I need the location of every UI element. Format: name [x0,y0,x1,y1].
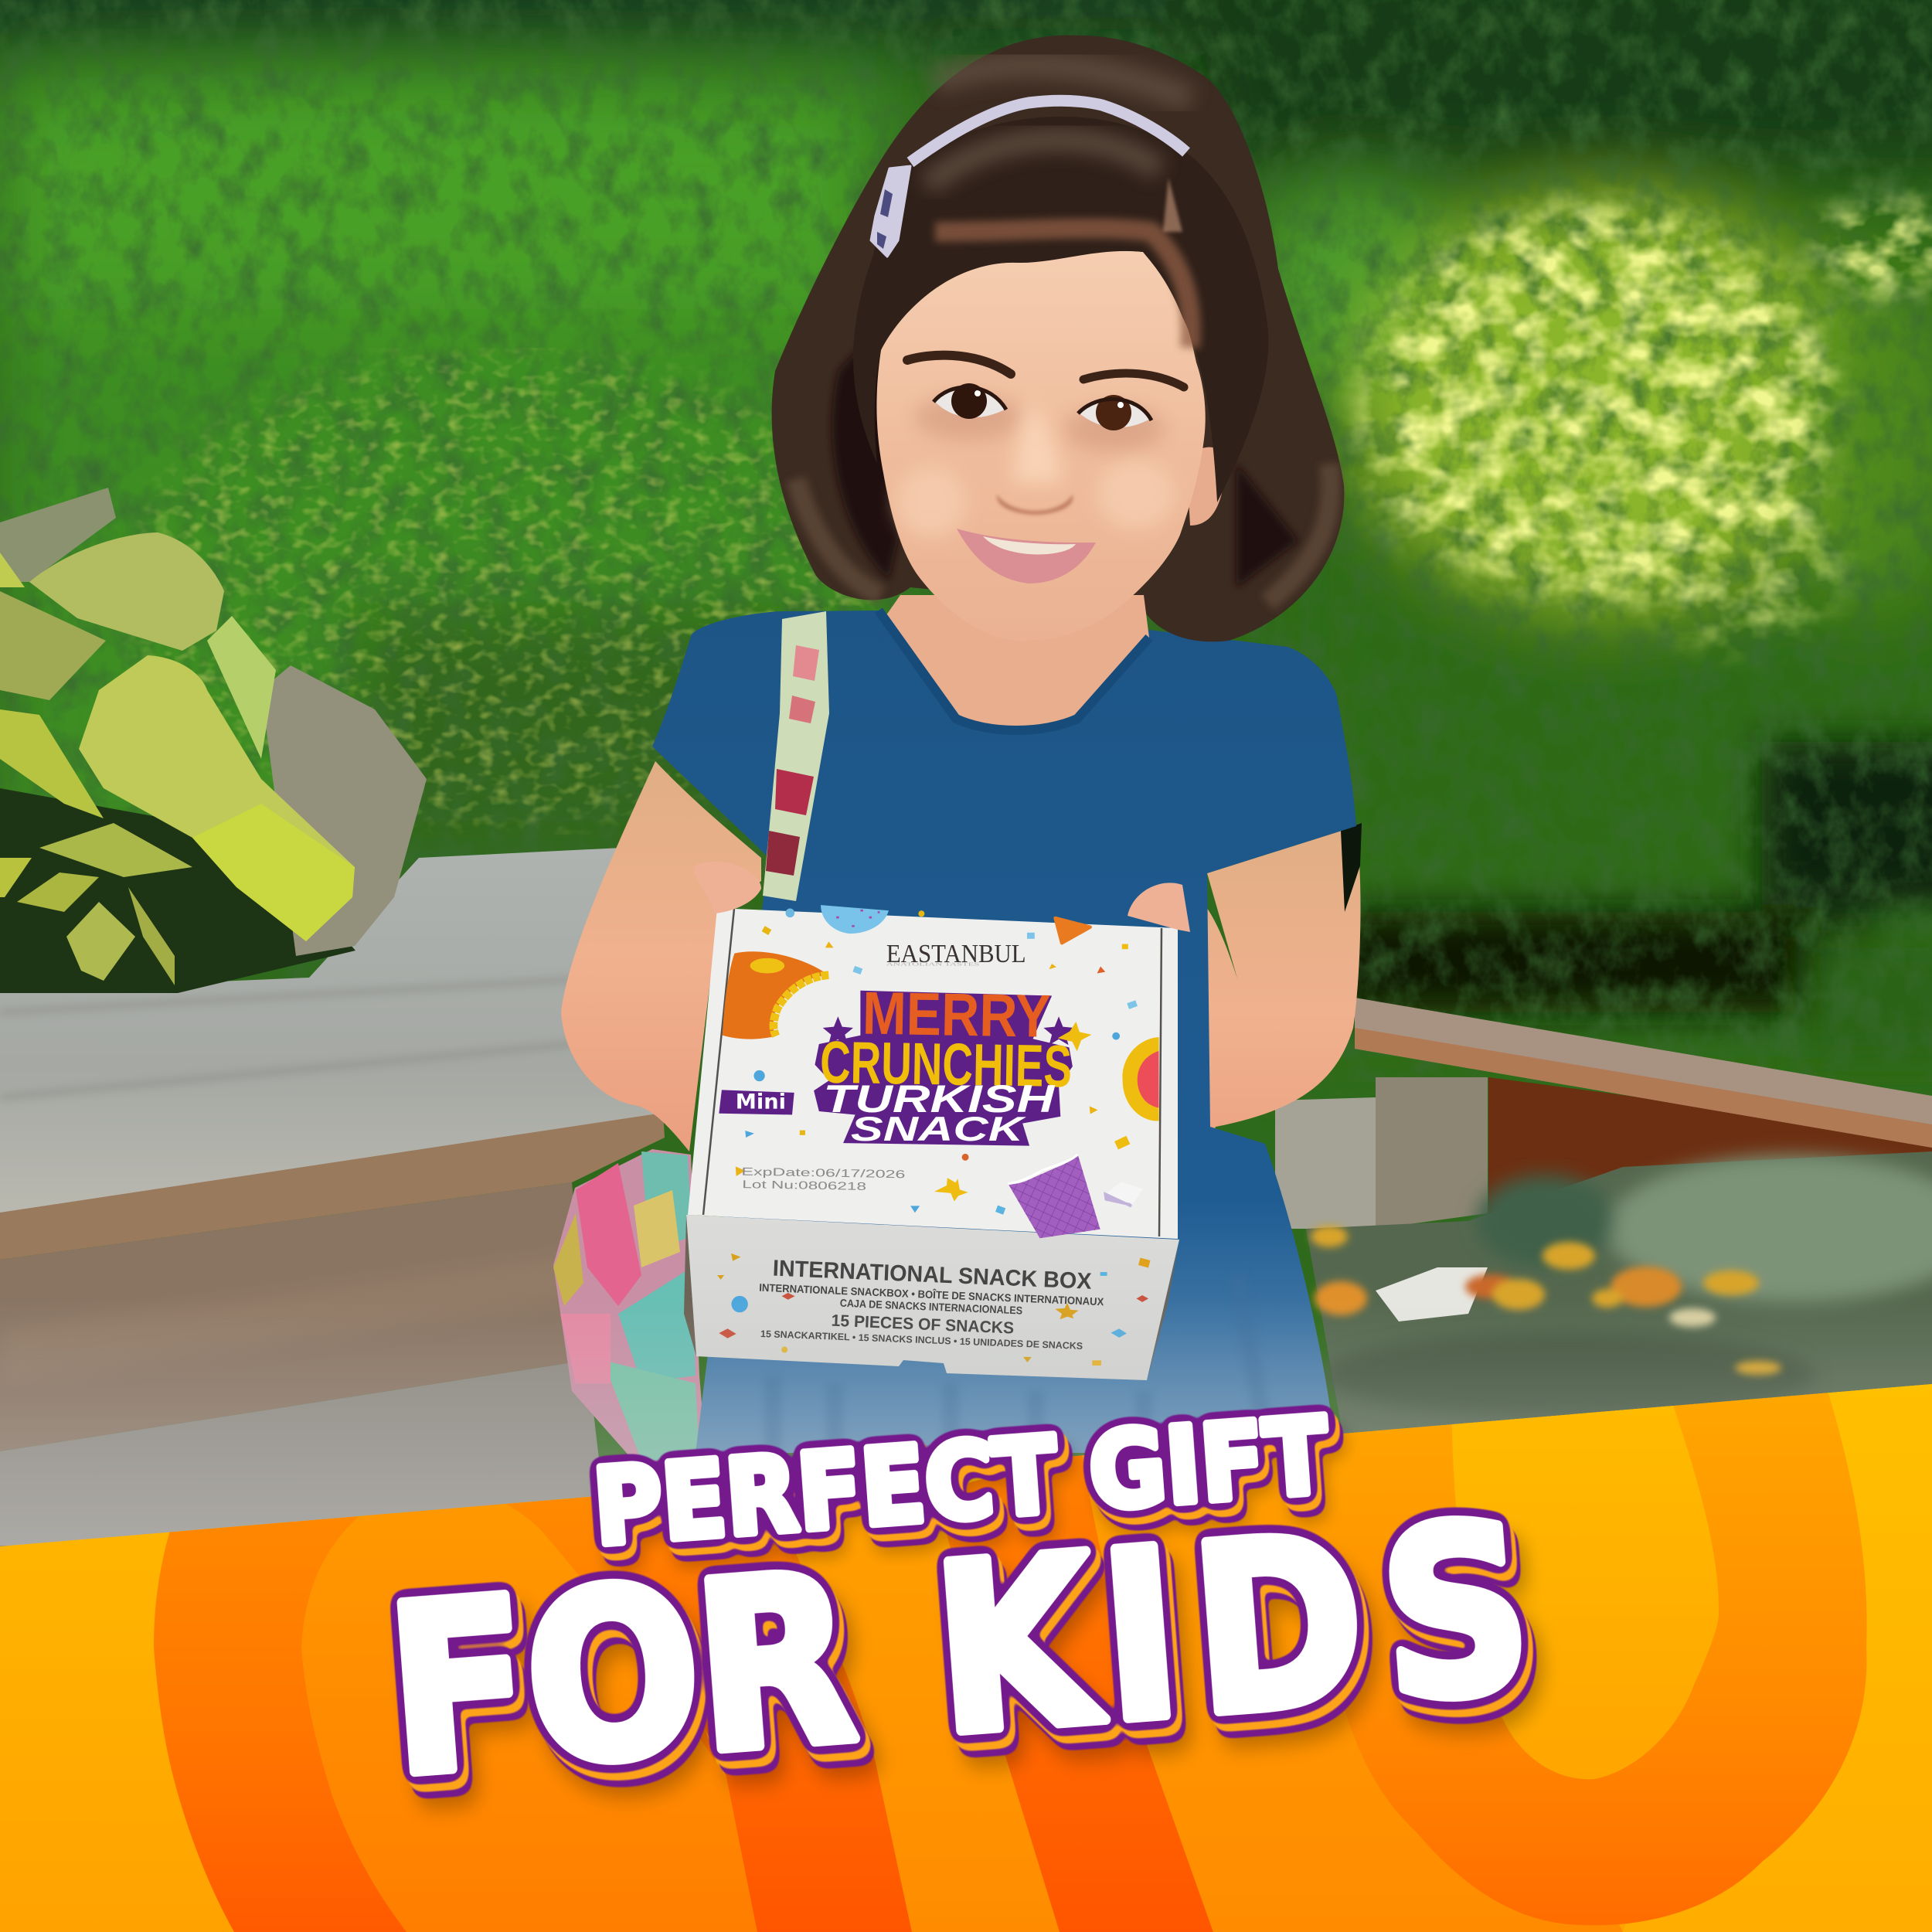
headline: perfect gift: PERFECT GIFT [590,1395,1332,1570]
banner: inner U [1451,1376,1719,1779]
yellow biscuit [1122,1037,1159,1121]
merry crunchies logo: CRUNCHIES [819,1029,1073,1100]
front text lines: 15 SNACKARTIKEL • 15 SNACKS INCLUS • 15 UNIDADES DE SNACKS [760,1328,1083,1352]
merry crunchies logo: SNACK [851,1111,1026,1148]
box top face [688,908,1178,1239]
backpack strap [763,611,829,901]
mini tag [719,1090,794,1114]
logo EASTANBUL: ANATOLIAN TASTES [886,962,980,968]
expiry and lot print: ExpDate:06/17/2026 [741,1166,906,1181]
banner: centre stripe gap [796,1516,1060,1932]
orange triangle snack [1056,918,1090,943]
eye shadow [915,394,1023,440]
smile [957,529,1096,583]
face [876,251,1206,641]
eyebrows [907,355,1184,387]
front confetti [717,1253,1151,1366]
box front printed text in local coordinates [717,1253,1151,1366]
banner: dark swoosh left [154,1468,773,1932]
blue biscuit [821,905,889,934]
confetti [736,909,1138,1215]
expiry and lot print [741,1166,906,1193]
stone steps [0,848,680,1623]
purple wafer [1008,1155,1100,1238]
box side fold [684,1215,696,1356]
box front face [686,1215,1179,1380]
wooden planter and flower bed [1275,998,1932,1445]
mini tag: Mini [736,1090,786,1114]
ear [1186,447,1226,526]
banner: light swoosh [301,1485,757,1932]
right eye [1078,395,1151,430]
headband [871,100,1186,257]
product box [684,862,1190,1380]
hair back [772,36,1344,641]
front text lines: 15 PIECES OF SNACKS [831,1311,1015,1338]
photo background: garden hedge [0,0,1932,1456]
orange curved banner [0,1376,1932,1932]
plant with pale leaves [0,488,427,993]
banner: far right yellow [1623,1376,1932,1932]
fade over lower photo [0,1298,1932,1546]
dress [652,611,1356,1453]
left eye [934,383,1006,419]
plant pot [261,665,427,956]
girl [561,36,1362,1453]
box top art in local coordinates [719,905,1159,1238]
right arm [1128,826,1361,1199]
dark shadow under right sleeve [1341,823,1362,912]
orange biscuit [723,951,828,1039]
banner: centre stripe one [591,1499,912,1932]
right fingers over box [1128,883,1190,932]
banner: orange field [1082,1383,1623,1932]
left fingers over box [694,862,761,913]
yellow star [934,1178,968,1202]
front text lines: INTERNATIONAL SNACK BOX [772,1256,1093,1294]
headline: for kids: FOR KIDS [379,1473,1539,1828]
left arm [561,761,761,1151]
logo EASTANBUL: EASTANBUL [886,940,1026,968]
nose [997,402,1073,515]
expiry and lot print: Lot Nu:0806218 [742,1179,866,1193]
banner: centre stripe two [935,1453,1213,1932]
hair front locks [853,117,1268,502]
neck [884,595,1149,730]
front text lines: INTERNATIONALE SNACKBOX • BOÎTE DE SNACKS INTERNATIONAUX [759,1281,1104,1308]
merry crunchies logo [814,979,1091,1148]
front text lines: CAJA DE SNACKS INTERNACIONALES [839,1297,1023,1317]
box flap lines [703,909,1162,1236]
banner: large U ring right [1326,1376,1867,1925]
merry crunchies logo: TURKISH [823,1077,1055,1121]
front text lines [759,1256,1104,1352]
merry crunchies logo: MERRY [862,979,1051,1050]
collar [879,611,1149,730]
backpack [553,1149,707,1468]
marshmallow cube [1105,1182,1143,1206]
